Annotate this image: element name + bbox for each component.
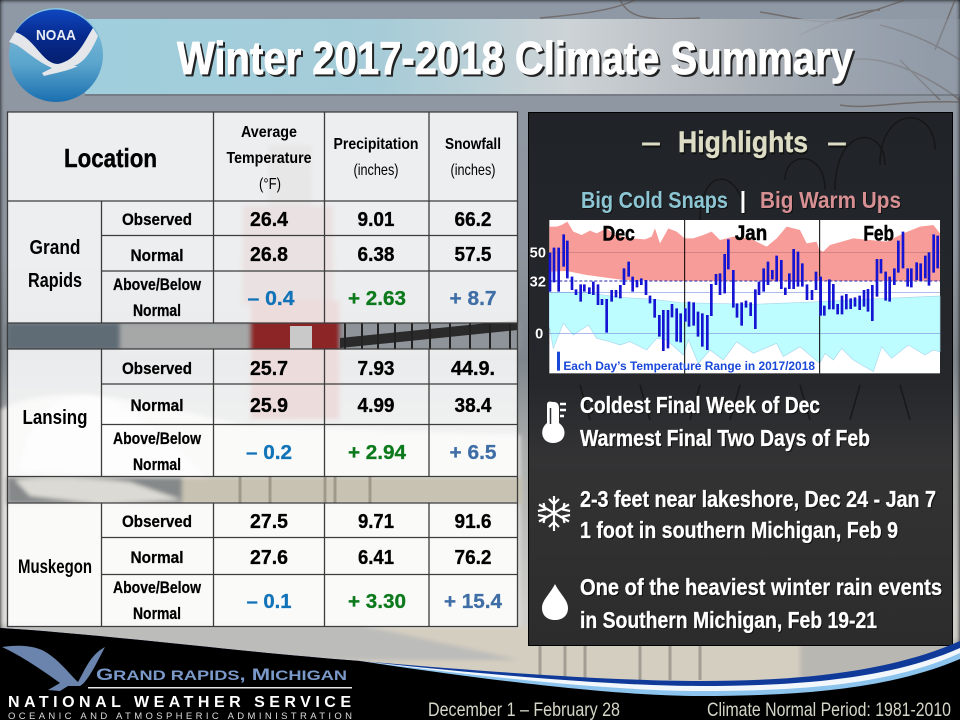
Lansing rows: 25.7 <box>250 358 288 380</box>
title banner <box>85 19 960 96</box>
axis labels: 50 <box>530 246 546 262</box>
Muskegon rows: + 15.4 <box>444 591 503 613</box>
Grand Rapids rows: + 2.63 <box>348 288 406 310</box>
table header: Temperature <box>226 150 312 167</box>
month labels: Jan <box>735 222 767 245</box>
Muskegon rows: 91.6 <box>454 511 492 533</box>
subheading: cold snaps and warm ups <box>581 187 901 213</box>
subheading: cold snaps and warm ups: | <box>740 187 746 213</box>
Muskegon rows: + 3.30 <box>348 591 406 613</box>
table cell backgrounds <box>8 112 518 626</box>
subheading: cold snaps and warm ups: Big Warm Ups <box>760 187 901 213</box>
Grand Rapids rows: Above/Below <box>113 275 202 294</box>
panel: highlights <box>528 112 952 646</box>
Lansing rows: 44.9. <box>451 358 495 380</box>
NOAA logo: NOAA <box>36 27 76 44</box>
table header: Average <box>241 124 297 141</box>
Lansing rows: 7.93 <box>358 358 394 380</box>
Lansing rows: Normal <box>130 396 184 415</box>
title: Winter 2017-2018 Climate Summary <box>177 32 853 84</box>
highlight: rain <box>580 574 942 633</box>
month labels <box>602 222 894 246</box>
Muskegon rows: 6.41 <box>358 547 394 569</box>
heading: Highlights: – <box>827 126 847 159</box>
axis labels: 0 <box>535 327 543 343</box>
NOAA logo <box>9 8 103 102</box>
Grand Rapids rows: 6.38 <box>358 244 394 266</box>
Lansing rows: Lansing <box>22 407 88 429</box>
Lansing rows: – 0.2 <box>246 442 292 464</box>
table header: (°F) <box>259 176 281 193</box>
chart: daily temperature range <box>530 220 940 373</box>
Grand Rapids rows <box>28 209 496 320</box>
Muskegon rows: Above/Below <box>113 578 202 597</box>
daily range bars <box>550 232 938 351</box>
highlight: rain: in Southern Michigan, Feb 19-21 <box>580 607 877 633</box>
Muskegon rows: Muskegon <box>18 557 92 578</box>
Grand Rapids rows: 26.8 <box>250 244 288 266</box>
Grand Rapids rows: 26.4 <box>250 209 289 231</box>
Grand Rapids rows: Grand <box>30 237 80 259</box>
Lansing rows: 38.4 <box>454 395 492 417</box>
axis labels: 32 <box>530 274 546 290</box>
chart caption: Each Day’s Temperature Range in 2017/2018 <box>563 359 815 373</box>
table header <box>64 124 501 193</box>
month labels: Dec <box>602 223 635 246</box>
table header: Location <box>64 143 157 173</box>
Lansing rows: Above/Below <box>113 429 202 448</box>
month labels: Feb <box>863 223 894 246</box>
table header: (inches) <box>450 162 496 179</box>
Muskegon rows: 27.5 <box>250 511 288 533</box>
footer band <box>0 628 960 720</box>
Grand Rapids rows: 66.2 <box>454 209 492 231</box>
Lansing rows: Normal <box>133 455 181 474</box>
logo: NWS bird <box>2 646 105 691</box>
Grand Rapids rows: Normal <box>133 301 181 320</box>
office name: G RAND RAPIDS , M ICHIGAN <box>96 665 347 684</box>
Grand Rapids rows: 57.5 <box>454 244 492 266</box>
Muskegon rows: Normal <box>130 548 184 567</box>
Lansing rows: 25.9 <box>250 395 288 417</box>
Grand Rapids rows: – 0.4 <box>248 288 295 310</box>
highlight: temperature: Coldest Final Week of Dec <box>580 392 820 418</box>
data table <box>8 112 518 626</box>
axis labels <box>530 246 546 343</box>
heading: Highlights: – <box>641 126 661 159</box>
Muskegon rows: 27.6 <box>250 547 288 569</box>
Grand Rapids rows: Normal <box>130 246 184 265</box>
Grand Rapids rows: Observed <box>122 210 192 229</box>
highlight: temperature <box>580 392 870 451</box>
Muskegon rows: 76.2 <box>454 547 492 569</box>
Lansing rows: + 6.5 <box>450 442 496 464</box>
Lansing rows <box>22 358 496 474</box>
Grand Rapids rows: + 8.7 <box>450 288 496 310</box>
Muskegon rows: Observed <box>122 512 192 531</box>
heading: Highlights: Highlights <box>678 126 808 159</box>
National Weather Service: NATIONAL WEATHER SERVICE <box>8 694 351 711</box>
Lansing rows: + 2.94 <box>348 442 407 464</box>
icon: snowflake <box>538 496 570 531</box>
rule <box>88 687 352 688</box>
Muskegon rows: Normal <box>133 604 181 623</box>
Muskegon rows: – 0.1 <box>246 591 292 613</box>
icon: water drop <box>542 584 568 620</box>
Muskegon rows: 9.71 <box>358 511 394 533</box>
table header: (inches) <box>354 162 398 179</box>
Grand Rapids rows: 9.01 <box>358 209 394 231</box>
highlight: snowfall: 1 foot in southern Michigan, Feb 9 <box>580 517 898 543</box>
Muskegon rows <box>18 511 503 623</box>
table header: Precipitation <box>334 136 418 153</box>
subheading: cold snaps and warm ups: Big Cold Snaps <box>581 187 728 213</box>
icon: thermometer <box>542 402 566 443</box>
highlight: temperature: Warmest Final Two Days of Feb <box>580 425 870 451</box>
table header: Snowfall <box>445 136 501 153</box>
Grand Rapids rows: Rapids <box>28 270 82 292</box>
Lansing rows: Observed <box>122 359 192 378</box>
Lansing rows: 4.99 <box>358 395 394 417</box>
highlight: snowfall <box>580 486 936 543</box>
